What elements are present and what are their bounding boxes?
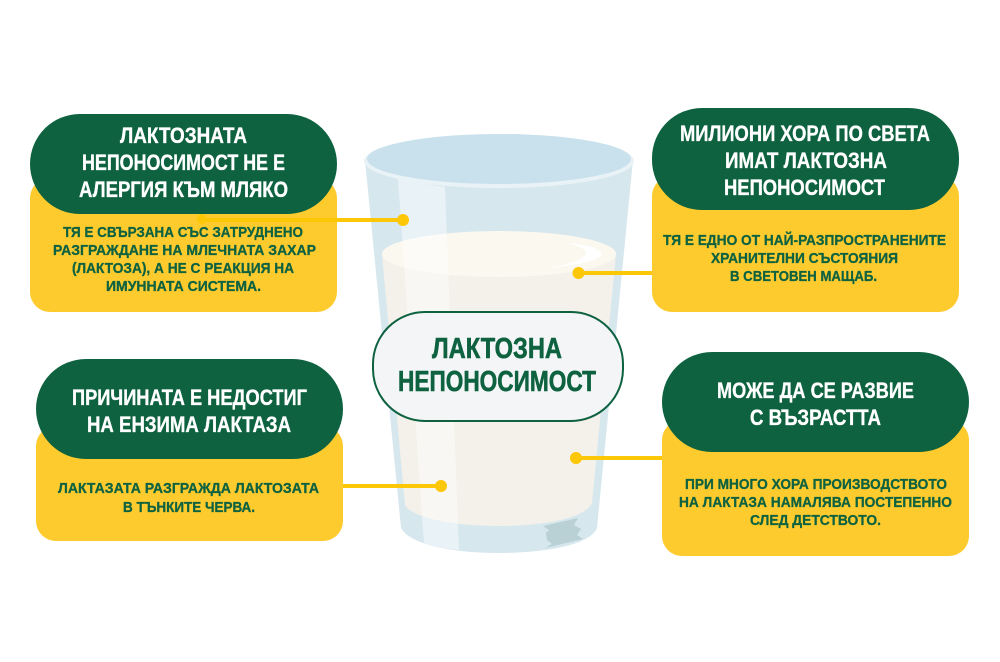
text: cause explanation [58,481,320,516]
milk surface [382,231,616,277]
title badge: НЕПОНОСИМОСТ [398,366,596,398]
text: allergy explanation: ТЯ Е СВЪРЗАНА СЪС ЗАТРУДНЕНО [63,225,303,241]
heading pill: millions [652,108,959,210]
text: age explanation: СЛЕД ДЕТСТВОТО. [750,513,881,529]
text: age explanation [679,477,952,529]
heading pill: allergy: НЕПОНОСИМОСТ НЕ Е [82,150,285,175]
heading pill: age: С ВЪЗРАСТТА [750,405,881,430]
heading pill: allergy: ЛАКТОЗНАТА [120,123,247,148]
milk body [382,254,616,526]
connector: millions [572,267,652,279]
heading pill: millions: МИЛИОНИ ХОРА ПО СВЕТА [680,121,930,146]
glass body [365,160,633,553]
glass opening [367,134,631,184]
title badge: ЛАКТОЗНА [432,333,562,365]
text: millions explanation: В СВЕТОВЕН МАЩАБ. [730,269,877,285]
glass rim [364,134,634,188]
heading pill: millions: НЕПОНОСИМОСТ [724,175,885,200]
text: age explanation: НА ЛАКТАЗА НАМАЛЯВА ПОСТЕПЕННО [679,495,952,511]
connector: allergy [197,214,409,226]
panel: allergy yellow box [30,178,337,312]
glass light band [398,179,459,550]
heading pill: age: МОЖЕ ДА СЕ РАЗВИЕ [717,378,914,403]
milk surface shine [548,243,602,268]
connector: cause [343,480,447,492]
heading pill: cause: ПРИЧИНАТА Е НЕДОСТИГ [72,385,307,410]
heading pill: allergy [30,114,337,214]
text: allergy explanation: (ЛАКТОЗА), А НЕ С РЕАКЦИЯ НА [72,261,294,277]
heading pill: age [662,352,969,452]
text: millions explanation [663,231,946,285]
connector: age [570,452,662,464]
glass base shadow [543,518,583,548]
heading pill: cause [36,359,343,459]
title badge [373,312,623,421]
text: millions explanation: ХРАНИТЕЛНИ СЪСТОЯНИЯ [711,251,898,267]
heading pill: allergy: АЛЕРГИЯ КЪМ МЛЯКО [79,177,288,202]
heading pill: millions: ИМАТ ЛАКТОЗНА [725,148,887,173]
text: cause explanation: ЛАКТАЗАТА РАЗГРАЖДА ЛАКТОЗАТА [58,481,320,497]
text: millions explanation: ТЯ Е ЕДНО ОТ НАЙ-РАЗПРОСТРАНЕНИТЕ [663,231,946,249]
text: allergy explanation: РАЗГРАЖДАНЕ НА МЛЕЧНАТА ЗАХАР [53,243,316,259]
panel: age yellow box [662,420,969,556]
panel: cause yellow box [36,426,343,541]
text: age explanation: ПРИ МНОГО ХОРА ПРОИЗВОДСТВОТО [685,477,947,493]
heading pill: cause: НА ЕНЗИМА ЛАКТАЗА [87,412,291,437]
text: cause explanation: В ТЪНКИТЕ ЧЕРВА. [123,500,255,516]
glass of milk [364,134,634,553]
text: allergy explanation [53,225,316,295]
text: allergy explanation: ИМУННАТА СИСТЕМА. [106,279,261,295]
panel: millions yellow box [652,176,959,312]
